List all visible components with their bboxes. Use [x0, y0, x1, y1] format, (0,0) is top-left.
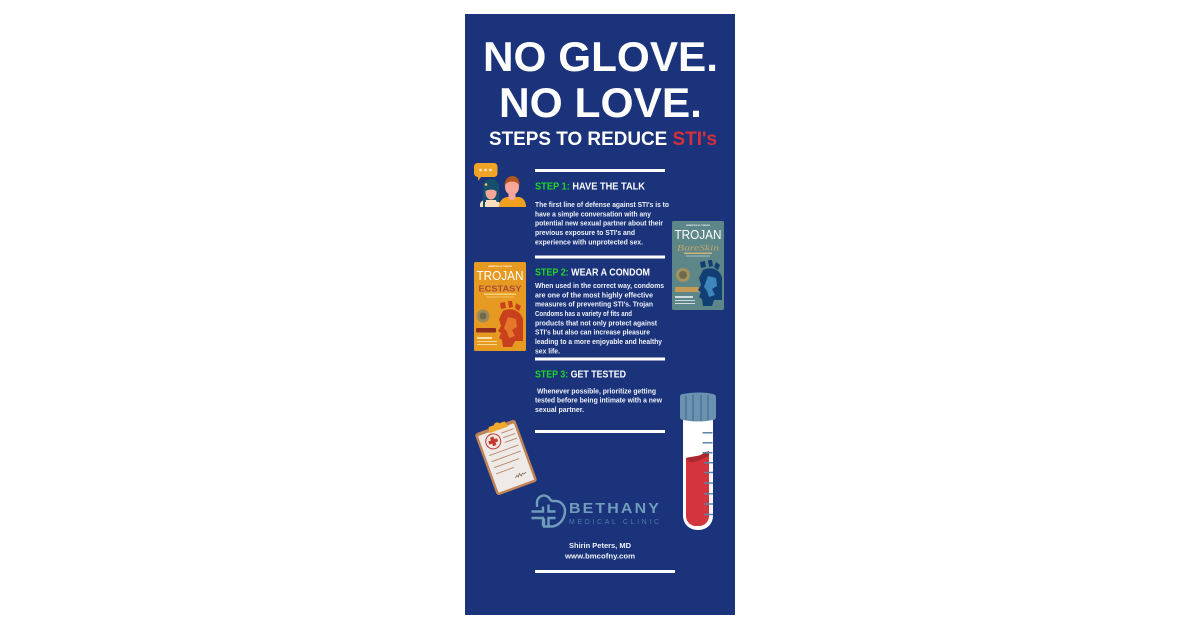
logo: Bethany Medical Clinic: BETHANY — [569, 500, 661, 517]
product: Trojan Ecstasy box — [474, 262, 526, 351]
step 2: sex life. — [535, 346, 560, 355]
step 3: tested before being intimate with a new — [535, 396, 662, 405]
product: Trojan BareSkin box: BareSkin — [677, 242, 719, 252]
contact details: www.bmcofny.com — [564, 552, 635, 560]
product: Trojan BareSkin box — [672, 221, 724, 310]
step 2 — [535, 268, 664, 355]
product: Trojan BareSkin box: AMERICA'S #1 CONDOM — [686, 224, 710, 227]
step 3 — [535, 370, 662, 414]
step 1: STEP 1: HAVE THE TALK — [535, 182, 646, 192]
product: Trojan Ecstasy box: AMERICA'S #1 CONDOM — [488, 265, 512, 268]
step 1: potential new sexual partner about their — [535, 219, 663, 228]
icon: blood test tube — [680, 392, 716, 530]
step 2: are one of the most highly effective — [535, 290, 653, 299]
step 2: STI's but also can increase pleasure — [535, 328, 650, 337]
step 1: previous exposure to STI's and — [535, 228, 635, 237]
logo: Bethany Medical Clinic: MEDICAL CLINIC — [569, 519, 659, 526]
subtitle: STEPS TO REDUCE STI's — [489, 128, 717, 150]
step 2: STEP 2: WEAR A CONDOM — [535, 268, 650, 278]
icon: two people talking — [474, 163, 526, 207]
step 3: sexual partner. — [535, 405, 584, 414]
step 2: products that not only protect against — [535, 318, 657, 327]
step 1: experience with unprotected sex. — [535, 237, 643, 246]
product: Trojan Ecstasy box: ECSTASY — [478, 284, 522, 294]
product: Trojan Ecstasy box: TROJAN — [476, 269, 524, 283]
title — [483, 33, 718, 126]
step 1: The first line of defense against STI's is to — [535, 200, 669, 209]
step 2: leading to a more enjoyable and healthy — [535, 337, 663, 346]
step 2: Condoms has a variety of fits and — [535, 309, 632, 318]
step 3: Whenever possible, prioritize getting — [537, 386, 656, 395]
step 2: measures of preventing STI's. Trojan — [535, 300, 653, 309]
icon: medical clipboard — [473, 416, 537, 496]
contact details: Shirin Peters, MD — [569, 541, 632, 550]
panel: poster background — [465, 14, 735, 615]
step 2: When used in the correct way, condoms — [535, 281, 664, 290]
title: NO GLOVE. — [483, 33, 718, 80]
logo: Bethany Medical Clinic — [532, 496, 661, 526]
product: Trojan BareSkin box: TROJAN — [674, 228, 722, 242]
step 1: have a simple conversation with any — [535, 209, 652, 218]
step 1 — [535, 182, 669, 246]
step 3: STEP 3: GET TESTED — [535, 370, 626, 380]
title: NO LOVE. — [499, 79, 702, 126]
contact details — [564, 541, 635, 560]
